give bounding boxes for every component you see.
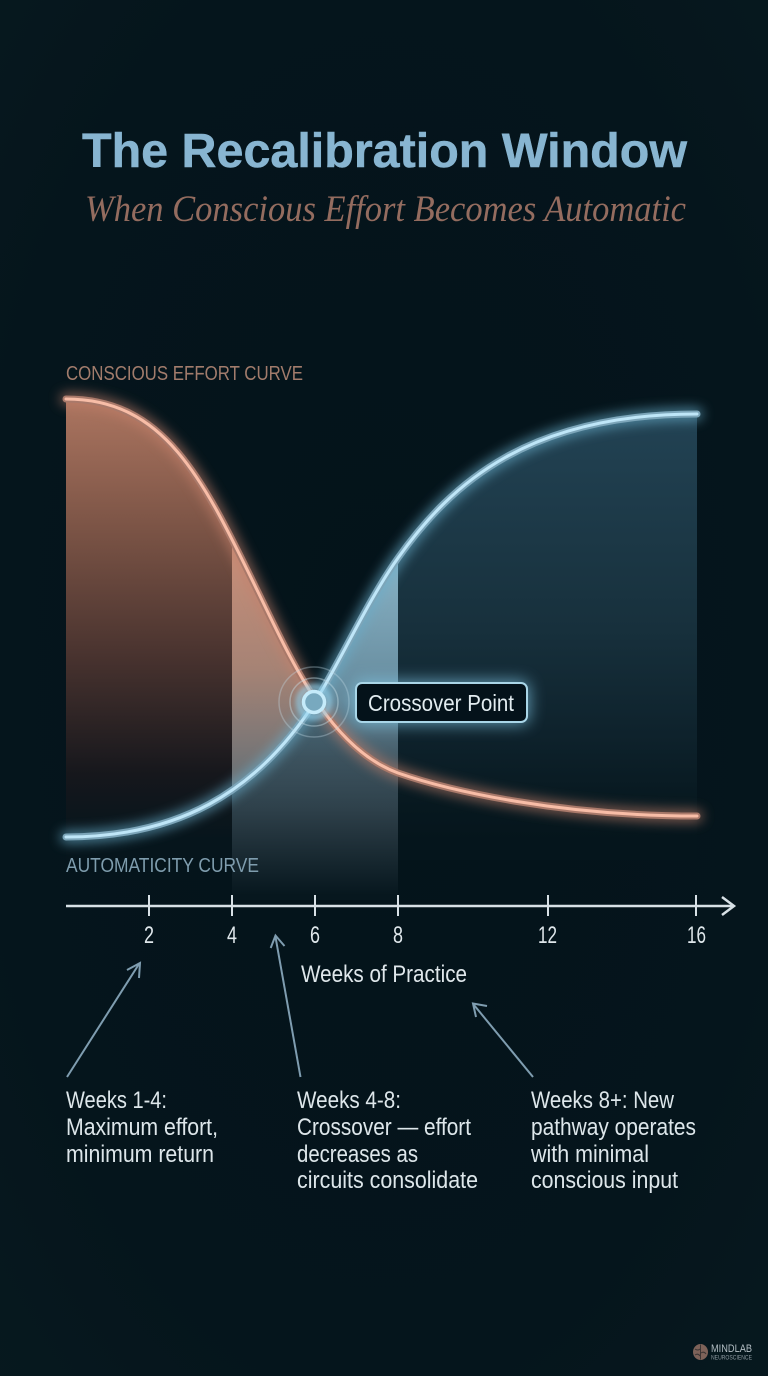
text: weeks 8 plus — [530, 1087, 696, 1194]
arrow: weeks 8 plus — [473, 1004, 533, 1077]
curve: conscious effort — [66, 399, 697, 816]
axis tick labels: 2 — [144, 922, 154, 949]
axis tick labels: 12 — [538, 922, 557, 949]
text: weeks 1-4: Weeks 1-4: — [66, 1087, 167, 1114]
marker: crossover point rings — [279, 667, 349, 737]
icon: brain — [693, 1344, 708, 1360]
axis tick labels: 8 — [393, 922, 403, 949]
label: conscious effort curve: CONSCIOUS EFFORT CURVE — [66, 363, 303, 385]
area: crossover band weeks 4-8 — [232, 564, 398, 900]
callout: crossover point: Crossover Point — [368, 690, 515, 716]
text: weeks 4-8: circuits consolidate — [297, 1167, 478, 1194]
text: weeks 4-8 — [297, 1087, 478, 1194]
axis tick labels: 16 — [687, 922, 706, 949]
text: weeks 4-8: Weeks 4-8: — [297, 1087, 401, 1114]
title: The Recalibration Window — [82, 125, 688, 178]
arrow: weeks 4-8 — [271, 936, 300, 1077]
axis: weeks of practice — [66, 895, 734, 916]
area: shade below both curves — [286, 713, 352, 760]
text: weeks 1-4: Maximum effort, — [66, 1114, 218, 1141]
curve: automaticity — [66, 414, 697, 837]
text: weeks 8 plus: with minimal — [530, 1141, 649, 1168]
logo: mindlab neuroscience: MINDLAB — [711, 1343, 752, 1355]
logo: mindlab neuroscience — [693, 1343, 752, 1362]
callout: crossover point — [354, 681, 529, 724]
axis tick labels: 4 — [227, 922, 237, 949]
area: effort share of band — [232, 548, 306, 786]
text: weeks 8 plus: conscious input — [531, 1167, 678, 1194]
subtitle: When Conscious Effort Becomes Automatic — [85, 189, 687, 230]
text: weeks 4-8: decreases as — [297, 1141, 418, 1168]
axis tick labels — [144, 922, 706, 949]
area: early effort weeks 1-4 — [66, 402, 232, 813]
label: automaticity curve: AUTOMATICITY CURVE — [66, 855, 259, 877]
text: weeks 8 plus: pathway operates — [531, 1114, 696, 1141]
text: weeks 4-8: Crossover — effort — [297, 1114, 471, 1141]
axis tick labels: 6 — [310, 922, 320, 949]
area: automaticity weeks 8 plus — [398, 418, 697, 788]
text: weeks 8 plus: Weeks 8+: New — [531, 1087, 675, 1114]
chart: crossover curves — [66, 399, 697, 900]
text: weeks 1-4 — [66, 1087, 218, 1168]
logo: mindlab neuroscience: NEUROSCIENCE — [711, 1356, 752, 1362]
text: weeks 1-4: minimum return — [66, 1141, 214, 1168]
axis title: Weeks of Practice — [301, 961, 467, 988]
arrow: weeks 1-4 — [67, 963, 140, 1077]
